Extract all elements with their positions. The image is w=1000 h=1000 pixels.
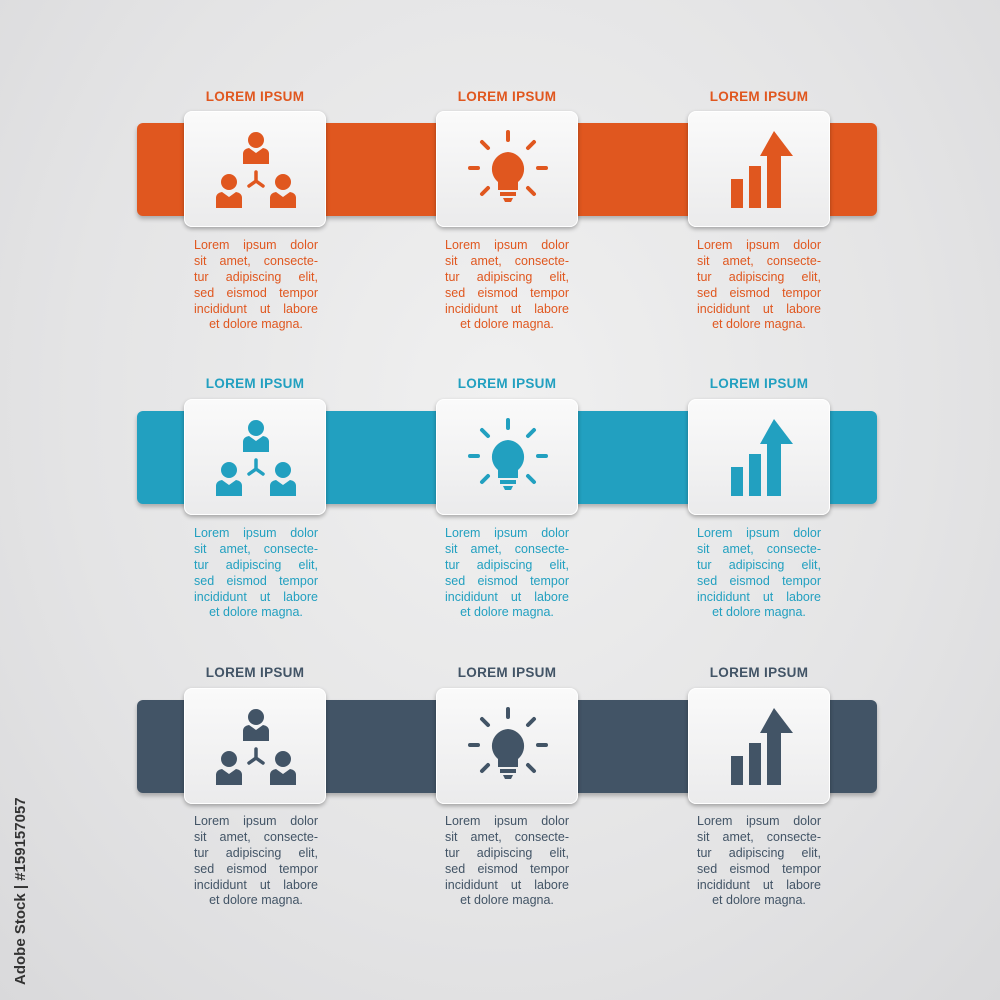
text 2: sed eismod tempor	[445, 286, 569, 300]
heading 1: LOREM IPSUM	[206, 665, 304, 680]
text 1: sed eismod tempor	[194, 286, 318, 300]
text 3: et dolore magna.	[712, 605, 806, 619]
text 3	[697, 526, 821, 619]
text 3: sed eismod tempor	[697, 574, 821, 588]
text 3: sit amet, consecte-	[697, 830, 821, 844]
text 2: Lorem ipsum dolor	[445, 526, 569, 540]
text 2: et dolore magna.	[460, 605, 554, 619]
text 3: Lorem ipsum dolor	[697, 238, 821, 252]
text 3: et dolore magna.	[712, 893, 806, 907]
band: slate	[137, 700, 877, 793]
text 1: incididunt ut labore	[194, 878, 318, 892]
text 2: Lorem ipsum dolor	[445, 814, 569, 828]
text 1: sed eismod tempor	[194, 862, 318, 876]
text 1	[194, 526, 318, 619]
text 2: incididunt ut labore	[445, 878, 569, 892]
card: bulb icon	[436, 111, 578, 227]
text 3: sit amet, consecte-	[697, 254, 821, 268]
heading 3: LOREM IPSUM	[710, 376, 808, 391]
band: orange	[137, 123, 877, 216]
heading 2: LOREM IPSUM	[458, 89, 556, 104]
card: team icon	[184, 111, 326, 227]
text 1: et dolore magna.	[209, 317, 303, 331]
text 2: tur adipiscing elit,	[445, 846, 569, 860]
card: growth chart icon	[688, 688, 830, 804]
text 1: et dolore magna.	[209, 605, 303, 619]
text 2: sit amet, consecte-	[445, 830, 569, 844]
heading 2: LOREM IPSUM	[458, 376, 556, 391]
text 3: sed eismod tempor	[697, 286, 821, 300]
text 3: sed eismod tempor	[697, 862, 821, 876]
text 1: tur adipiscing elit,	[194, 846, 318, 860]
text 3: sit amet, consecte-	[697, 542, 821, 556]
text 2	[445, 238, 569, 331]
text 3: et dolore magna.	[712, 317, 806, 331]
heading 1: LOREM IPSUM	[206, 376, 304, 391]
text 1: Lorem ipsum dolor	[194, 238, 318, 252]
text 3: Lorem ipsum dolor	[697, 526, 821, 540]
text 2: et dolore magna.	[460, 893, 554, 907]
row 1 orange	[134, 89, 880, 331]
text 2: incididunt ut labore	[445, 302, 569, 316]
text 2: Lorem ipsum dolor	[445, 238, 569, 252]
text 1: incididunt ut labore	[194, 302, 318, 316]
heading 2: LOREM IPSUM	[458, 665, 556, 680]
text 1: et dolore magna.	[209, 893, 303, 907]
text 3: tur adipiscing elit,	[697, 270, 821, 284]
text 2: sed eismod tempor	[445, 862, 569, 876]
band: blue	[137, 411, 877, 504]
text 3	[697, 814, 821, 907]
card: growth chart icon	[688, 399, 830, 515]
text 2: sit amet, consecte-	[445, 542, 569, 556]
text 1	[194, 238, 318, 331]
text 3: tur adipiscing elit,	[697, 558, 821, 572]
text 2: tur adipiscing elit,	[445, 558, 569, 572]
text 1: incididunt ut labore	[194, 590, 318, 604]
text 2: sit amet, consecte-	[445, 254, 569, 268]
text 3: incididunt ut labore	[697, 878, 821, 892]
card: team icon	[184, 688, 326, 804]
card: bulb icon	[436, 688, 578, 804]
heading 3: LOREM IPSUM	[710, 665, 808, 680]
text 1: sed eismod tempor	[194, 574, 318, 588]
text 1: Lorem ipsum dolor	[194, 814, 318, 828]
heading 3: LOREM IPSUM	[710, 89, 808, 104]
text 1: sit amet, consecte-	[194, 254, 318, 268]
text 1: tur adipiscing elit,	[194, 270, 318, 284]
text 1: sit amet, consecte-	[194, 542, 318, 556]
text 2: tur adipiscing elit,	[445, 270, 569, 284]
heading 1: LOREM IPSUM	[206, 89, 304, 104]
text 2: sed eismod tempor	[445, 574, 569, 588]
text 3: tur adipiscing elit,	[697, 846, 821, 860]
text 1: tur adipiscing elit,	[194, 558, 318, 572]
card: growth chart icon	[688, 111, 830, 227]
row 2 blue	[134, 376, 880, 619]
text 2	[445, 526, 569, 619]
text 1: sit amet, consecte-	[194, 830, 318, 844]
text 1: Lorem ipsum dolor	[194, 526, 318, 540]
text 2: incididunt ut labore	[445, 590, 569, 604]
text 2	[445, 814, 569, 907]
card: team icon	[184, 399, 326, 515]
card: bulb icon	[436, 399, 578, 515]
side watermark text: Adobe Stock | #159157057	[12, 797, 29, 985]
text 3: incididunt ut labore	[697, 302, 821, 316]
row 3 dark slate	[134, 665, 880, 907]
text 3: Lorem ipsum dolor	[697, 814, 821, 828]
text 3	[697, 238, 821, 331]
text 1	[194, 814, 318, 907]
text 2: et dolore magna.	[460, 317, 554, 331]
text 3: incididunt ut labore	[697, 590, 821, 604]
